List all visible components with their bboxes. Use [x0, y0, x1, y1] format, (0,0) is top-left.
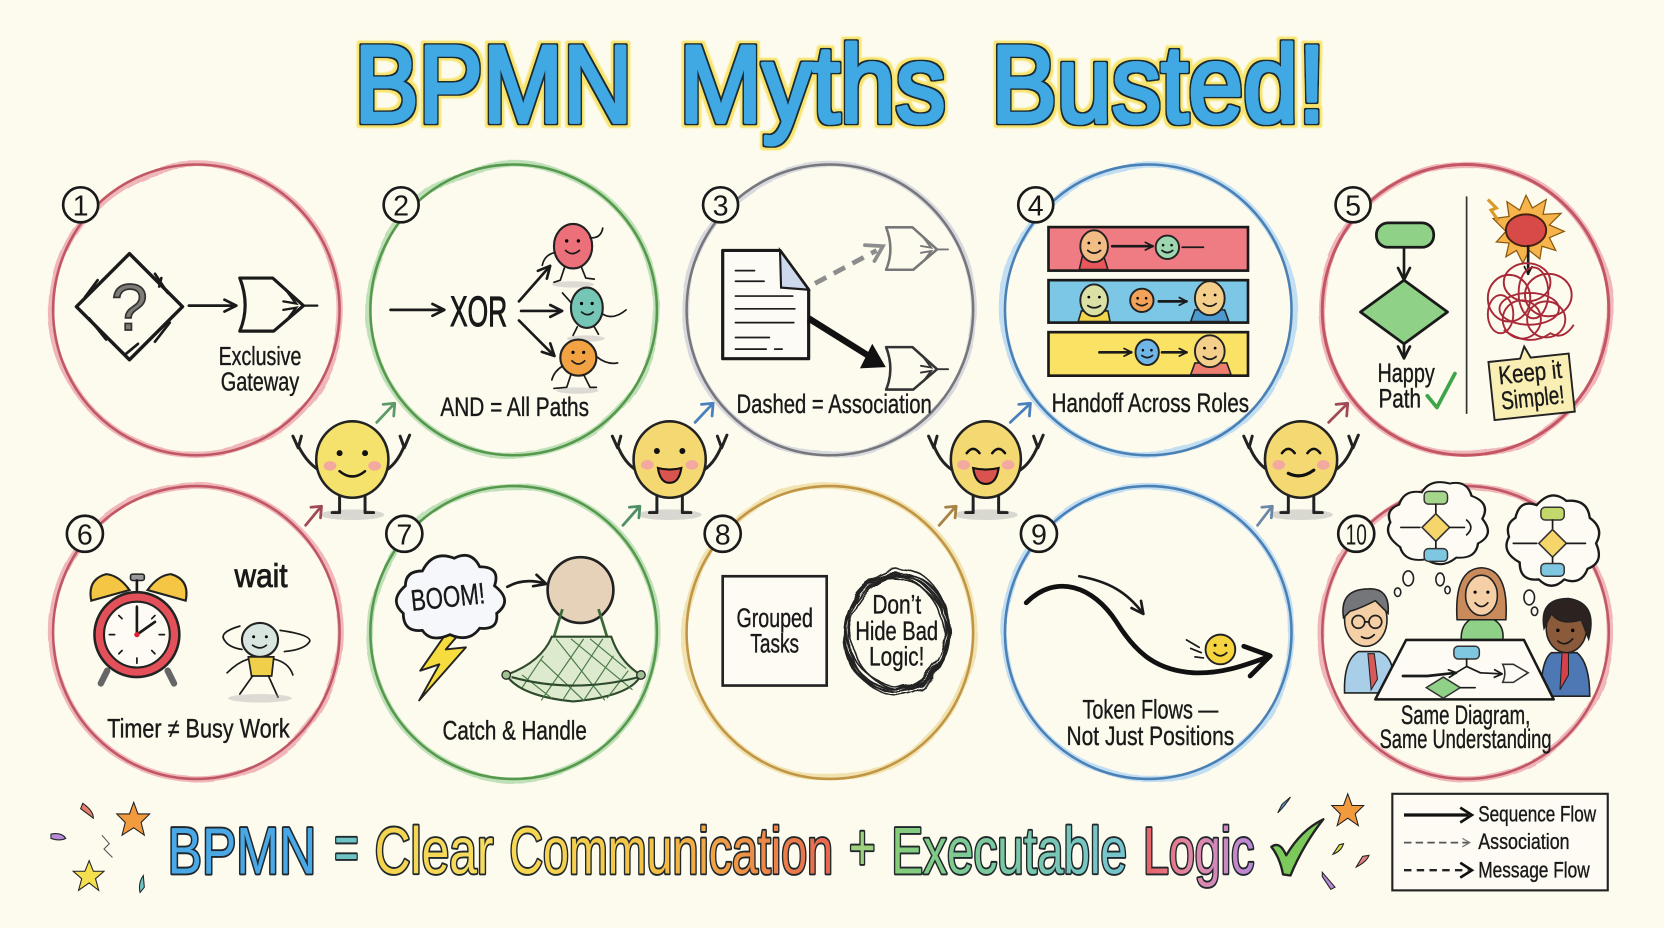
panel 4: handoff across roles — [1004, 164, 1293, 455]
orange token — [552, 340, 618, 394]
lane: yellow — [1048, 332, 1248, 376]
badge 2: 2 — [393, 190, 409, 222]
icon: spinning figure — [223, 623, 310, 703]
badge 9: 9 — [1031, 519, 1047, 551]
arrow to ball — [507, 581, 545, 587]
badge 3: 3 — [713, 190, 729, 222]
icon: lightning — [419, 622, 466, 700]
panel 8: grouped tasks — [686, 486, 974, 779]
lane: blue — [1048, 280, 1248, 323]
mascot 3 — [929, 421, 1043, 520]
label: same diagram same understanding — [1380, 700, 1552, 754]
small connector arrows — [306, 403, 1348, 525]
label: Dashed = Association: Dashed = Association — [736, 389, 932, 419]
legend: sequence flow: Sequence Flow — [1478, 801, 1597, 826]
panel 5: happy path vs tangle — [1321, 164, 1610, 455]
badge 9 — [1021, 516, 1057, 552]
scribbled group: don't hide bad logic: Logic! — [869, 641, 924, 671]
icon: green check — [1427, 374, 1455, 408]
thought bubbles — [1394, 571, 1538, 616]
title: BPMN — [354, 24, 632, 146]
badge 5 — [1336, 187, 1371, 222]
footer equation: Communication — [509, 813, 833, 887]
badge 2 — [384, 187, 419, 222]
badge 10 — [1338, 516, 1374, 552]
legend: sequence flow — [1404, 801, 1597, 826]
label: Catch & Handle: Catch & Handle — [443, 716, 587, 746]
lane: red — [1048, 227, 1248, 271]
legend: message flow: Message Flow — [1478, 858, 1590, 883]
scribbled group: don't hide bad logic: Don’t — [872, 589, 922, 619]
label: exclusive gateway — [219, 343, 301, 397]
grouped tasks box: Grouped — [736, 603, 813, 633]
badge 7 — [386, 516, 422, 552]
arrow — [189, 304, 236, 307]
label: same diagram same understanding: Same Understanding — [1380, 724, 1552, 754]
title: Busted! — [991, 24, 1325, 146]
label: token flows: Token Flows — — [1082, 694, 1219, 724]
legend: message flow — [1404, 858, 1590, 883]
badge 8 — [705, 516, 741, 552]
gray gateway — [886, 227, 948, 270]
footer equation: BPMN — [168, 813, 316, 887]
icon: ball — [548, 557, 613, 623]
footer equation: = — [334, 810, 359, 884]
arrow down to tangle — [1527, 246, 1529, 274]
footer equation: Clear — [375, 813, 493, 887]
panel 10: same understanding — [1321, 482, 1610, 779]
badge 10: 10 — [1346, 519, 1367, 551]
footer equation: Executable — [891, 813, 1127, 887]
label: happy path: Path — [1379, 384, 1421, 414]
badge 4 — [1018, 187, 1053, 222]
panel 2: AND all paths — [369, 164, 658, 455]
icon: question diamond: ? — [111, 270, 148, 344]
icon: token — [1186, 635, 1235, 664]
title: Myths — [679, 24, 946, 146]
scribbled group: don't hide bad logic: Hide Bad — [855, 616, 938, 646]
mascot 1 — [293, 421, 410, 520]
label: Timer ≠ Busy Work: Timer ≠ Busy Work — [107, 714, 290, 744]
badge 3 — [703, 187, 738, 222]
mascot 2 — [612, 421, 727, 520]
footer equation: Logic — [1143, 813, 1254, 887]
icon: net — [502, 609, 645, 701]
badge 5: 5 — [1345, 190, 1361, 222]
mascot 4 — [1244, 421, 1358, 520]
panel 9: token flows — [1004, 486, 1293, 779]
black gateway — [886, 347, 948, 390]
label: happy path: Happy — [1377, 358, 1435, 388]
thought cloud right — [1506, 495, 1599, 586]
badge 1 — [63, 187, 98, 222]
footer equation: + — [849, 810, 876, 884]
confetti right — [1278, 794, 1369, 889]
icon: explosion — [1493, 195, 1564, 263]
badge 4: 4 — [1028, 190, 1044, 222]
grouped tasks box — [723, 576, 827, 686]
title — [354, 24, 1325, 146]
legend: association — [1404, 829, 1570, 854]
three branch arrows — [519, 266, 561, 356]
sticky note: keep it simple — [1487, 342, 1575, 420]
badge 7: 7 — [396, 519, 412, 551]
thought cloud left — [1388, 482, 1488, 564]
grouped tasks box: Tasks — [750, 629, 799, 659]
arrow in — [391, 309, 444, 311]
panel 3: dashed association — [686, 164, 974, 455]
bold black arrow — [809, 318, 884, 367]
badge 6 — [67, 516, 103, 552]
divider — [1466, 196, 1468, 414]
icon: footer check — [1271, 819, 1323, 876]
person: dark-haired man — [1541, 599, 1591, 696]
panel 6: timer vs busy work — [52, 486, 341, 779]
label: token flows: Not Just Positions — [1067, 721, 1234, 751]
panel 1: exclusive gateway — [52, 164, 341, 455]
thick flow curve — [1026, 586, 1270, 676]
label: same diagram same understanding: Same Diagram, — [1401, 700, 1530, 730]
legend: association: Association — [1478, 829, 1570, 854]
icon: question diamond — [76, 254, 183, 360]
icon: small spark — [1488, 200, 1498, 221]
icon: BOOM cloud: BOOM! — [409, 577, 487, 618]
XOR text: XOR — [450, 288, 507, 335]
label: token flows — [1067, 694, 1234, 751]
label: AND = All Paths: AND = All Paths — [440, 392, 589, 422]
badge 8: 8 — [715, 519, 731, 551]
confetti left — [51, 802, 150, 892]
icon: BOOM cloud — [396, 555, 505, 638]
thin arrow — [1079, 576, 1143, 613]
badge 1: 1 — [73, 190, 89, 222]
icon: document — [723, 250, 809, 359]
person: man with glasses — [1343, 589, 1392, 693]
red token — [542, 224, 603, 288]
label: exclusive gateway: Gateway — [221, 369, 299, 397]
label: Handoff Across Roles: Handoff Across Roles — [1052, 388, 1249, 418]
scribbled group: don't hide bad logic — [826, 558, 968, 707]
badge 6: 6 — [77, 519, 93, 551]
panel 7: catch and handle — [369, 486, 658, 779]
icon: gateway — [240, 278, 317, 331]
teal token — [562, 288, 626, 342]
footer equation — [168, 810, 1254, 887]
label: exclusive gateway: Exclusive — [219, 343, 301, 371]
icon: red tangled scribble — [1488, 263, 1574, 340]
text: wait: wait — [234, 557, 288, 594]
legend — [1392, 794, 1608, 890]
dashed gray arrow — [815, 245, 883, 283]
person: woman — [1457, 568, 1506, 641]
label: happy path — [1377, 358, 1435, 414]
table with diagram — [1375, 640, 1554, 699]
icon: alarm clock — [90, 574, 186, 683]
icon: happy path flow — [1360, 223, 1448, 358]
sticky note: keep it simple: Keep it — [1497, 356, 1563, 390]
sticky note: keep it simple: Simple! — [1500, 381, 1566, 416]
